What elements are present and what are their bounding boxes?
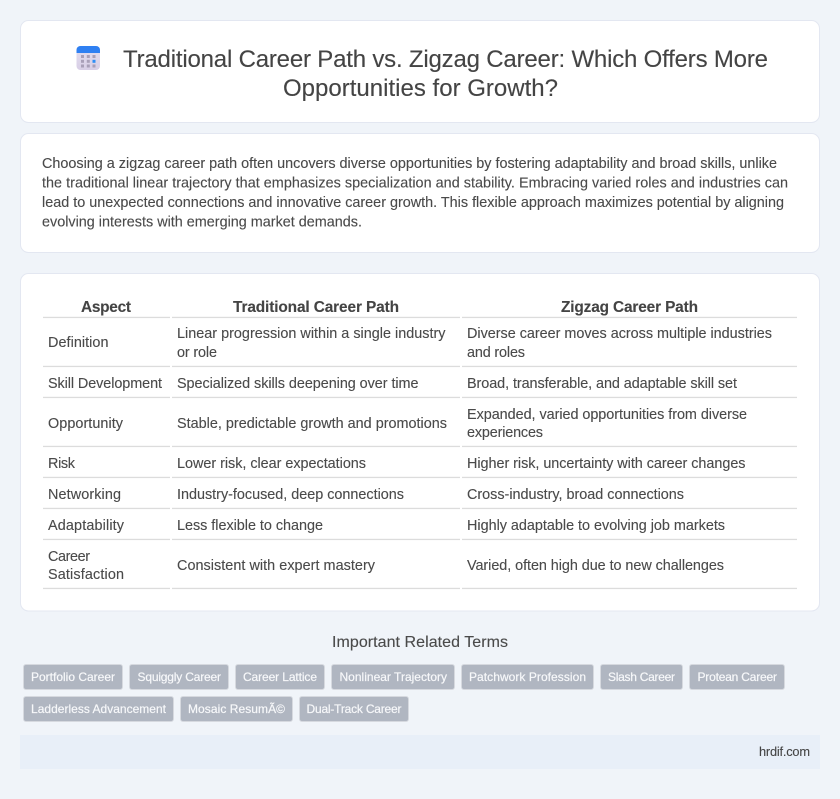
tag: protean career xyxy=(690,664,784,690)
row: risk: Lower risk, clear expectations xyxy=(177,456,366,472)
row: definition: Definition xyxy=(48,335,108,351)
tag: mosaic resume: Mosaic ResumÃ© xyxy=(188,702,285,716)
row: risk xyxy=(48,456,746,472)
row: definition: Linear progression within a single industry xyxy=(177,326,446,342)
row: opportunity xyxy=(48,407,747,441)
tag: ladderless advancement: Ladderless Advancement xyxy=(31,702,167,716)
tag: patchwork profession: Patchwork Profession xyxy=(469,670,586,684)
row: opportunity: Stable, predictable growth and promotions xyxy=(177,416,447,432)
row: definition: or role xyxy=(177,345,217,361)
tag: portfolio career xyxy=(24,664,122,690)
title xyxy=(123,46,768,102)
tag: career lattice xyxy=(236,664,324,690)
footer bar: hrdif.com xyxy=(759,744,810,759)
icon: calendar xyxy=(76,46,100,70)
tag: dual-track career xyxy=(300,696,408,722)
row: networking: Industry-focused, deep connections xyxy=(177,487,404,503)
panel: introduction text: evolving interests with emerging market demands. xyxy=(42,214,362,230)
table header row: Aspect xyxy=(81,299,131,316)
row: career satisfaction xyxy=(48,549,724,583)
row: networking: Networking xyxy=(48,487,121,503)
row: opportunity: experiences xyxy=(467,425,543,441)
row: skill development: Skill Development xyxy=(48,376,162,392)
tag: nonlinear trajectory: Nonlinear Trajectory xyxy=(340,670,447,684)
row: risk: Higher risk, uncertainty with career changes xyxy=(467,456,746,472)
row: skill development: Broad, transferable, and adaptable skill set xyxy=(467,376,737,392)
row: career satisfaction: Career xyxy=(48,549,90,565)
panel: introduction text xyxy=(20,134,820,252)
row: skill development: Specialized skills deepening over time xyxy=(177,376,418,392)
table header row xyxy=(81,299,698,316)
row: risk: Risk xyxy=(48,456,76,472)
row: definition: Diverse career moves across multiple industries xyxy=(467,326,772,342)
panel: related term tags xyxy=(24,664,784,722)
tag: slash career: Slash Career xyxy=(608,670,675,684)
tag: nonlinear trajectory xyxy=(332,664,454,690)
heading: important related terms: Important Related Terms xyxy=(332,634,508,651)
panel: introduction text: Choosing a zigzag career path often uncovers diverse opportunities by fostering adaptability and broad skills, unlike xyxy=(42,156,777,172)
panel: introduction text: the traditional linear trajectory that emphasizes specialization and stability. Embracing varied roles and industries can xyxy=(42,176,788,192)
tag: squiggly career xyxy=(130,664,228,690)
table header row: Zigzag Career Path xyxy=(561,299,698,316)
panel: header xyxy=(20,20,820,122)
tag: career lattice: Career Lattice xyxy=(243,670,317,684)
row: definition xyxy=(48,326,772,361)
row: skill development xyxy=(48,376,737,392)
row: career satisfaction: Varied, often high due to new challenges xyxy=(467,558,724,574)
footer bar xyxy=(20,735,820,769)
title: Traditional Career Path vs. Zigzag Career: Which Offers More xyxy=(123,46,768,73)
row: adaptability xyxy=(48,518,725,534)
tag: slash career xyxy=(600,664,682,690)
panel: introduction text: lead to unexpected connections and innovative career growth. This flexible approach maximizes potential by aligning xyxy=(42,195,784,211)
row: career satisfaction: Satisfaction xyxy=(48,567,124,583)
row: opportunity: Expanded, varied opportunities from diverse xyxy=(467,407,747,423)
tag: dual-track career: Dual-Track Career xyxy=(306,702,402,716)
tag: squiggly career: Squiggly Career xyxy=(138,670,221,684)
tag: ladderless advancement xyxy=(24,696,174,722)
row: adaptability: Adaptability xyxy=(48,518,125,534)
panel: comparison table xyxy=(20,274,820,611)
row: networking xyxy=(48,487,684,503)
row: adaptability: Less flexible to change xyxy=(177,518,323,534)
tag: mosaic resume xyxy=(180,696,292,722)
row: definition: and roles xyxy=(467,345,525,361)
title: Opportunities for Growth? xyxy=(283,75,558,102)
row: adaptability: Highly adaptable to evolving job markets xyxy=(467,518,725,534)
table header row: Traditional Career Path xyxy=(233,299,399,316)
tag: protean career: Protean Career xyxy=(698,670,777,684)
tag: portfolio career: Portfolio Career xyxy=(31,670,115,684)
row: networking: Cross-industry, broad connections xyxy=(467,487,684,503)
row: opportunity: Opportunity xyxy=(48,416,124,432)
tag: patchwork profession xyxy=(462,664,594,690)
row: career satisfaction: Consistent with expert mastery xyxy=(177,558,376,574)
